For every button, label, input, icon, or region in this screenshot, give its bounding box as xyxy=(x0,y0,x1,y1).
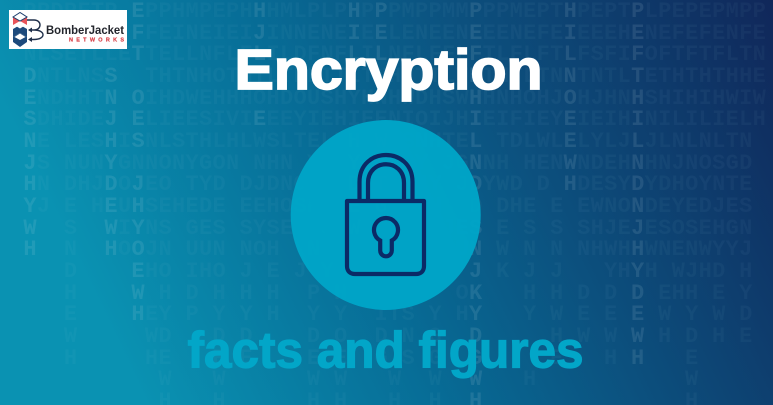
background: matrix of code letters: SDHIDEJ ELIEESIVIEEEYIEHIEENIOIJHIEIFIEYEIEIHINILILIELH xyxy=(23,107,766,132)
background: matrix of code letters: NLSETLLETTELLNFLFLILDFNFLILNFLFFLFTLFLFTLFSFIFOFTFTFLTN xyxy=(23,42,766,67)
background: matrix of code letters: W S WIYNS GES SYSE S W Y ESJES E S S SHJEJESOSEHGN xyxy=(23,216,766,241)
title: Encryption xyxy=(234,38,542,102)
icon: padlock xyxy=(347,155,424,274)
background: matrix of code letters: ENDHHTN OIHDWEHHHOHDOUSHYHNHWDHSWHHNHOHJOHJHNHSHIHIHWIW xyxy=(23,86,767,111)
padlock keyhole xyxy=(374,218,398,256)
background: matrix of code letters: W WD D D D O D N G D H W W W H D H E xyxy=(23,324,766,349)
background: matrix of code letters: W W W W W W W H W xyxy=(23,367,766,392)
background: matrix of code letters: YJ E HEUHSEHEDE EEHOSH NE GEUEH D DHE E EWNONDEYEDJES xyxy=(23,194,766,219)
subtitle: facts and figures xyxy=(188,322,584,378)
background: matrix of code letters: E HEY P Y Y H Y Y ITS Y HY Y W E E E W Y W D xyxy=(23,302,766,327)
background: matrix of code letters: H HE E E E E G S G G E H H E xyxy=(23,346,773,371)
background: matrix of code letters: HN DHJDOJEO TYD DJDNOJHJD TODJY JDYWD D HDESYDYDHOYNTE xyxy=(23,172,766,197)
background: matrix of code letters: JS NUNYGNNONYGON NHN Y GY YDLY JGNNH HENWNDEHNHNJNOSGD xyxy=(23,151,766,176)
padlock shackle xyxy=(360,155,412,199)
padlock body xyxy=(347,201,424,274)
logo wordmark: BomberJacket xyxy=(46,23,124,37)
icon: stacked hexagon logo mark xyxy=(13,12,43,47)
background: matrix of code letters: D EHO IHO J E J Y G H H J K J J YHYH WJHD H xyxy=(23,259,766,284)
background: matrix of code letters: H N HOOJN UUN NOH N H U UHJUN W N N NHWHHWNENWYYJ xyxy=(23,237,766,262)
background: matrix of code letters: H W H D H H H P H U OK H H D D D EHH E Y xyxy=(23,281,766,306)
background: matrix of code letters: DNTLNSS THTNHOTHTLTNHTTLTNHTTTLTNTNTLTNNTNTLTETHTHTHHE xyxy=(23,64,766,89)
background: matrix of code letters: EEHENEF FFEINEIEIJINNENEIEELENEENEEENEFEIEEEHENEFEFENFE xyxy=(23,21,766,46)
background: matrix of code letters: NE LESHISNLSTHLHLWSLTELNHJWLSNHTEL TDLWLELYLJLJLNLNLTN xyxy=(23,129,766,154)
logo tagline: NETWORKS xyxy=(69,38,124,44)
logo: BomberJacket Networks xyxy=(9,10,127,49)
icon circle xyxy=(291,120,481,310)
